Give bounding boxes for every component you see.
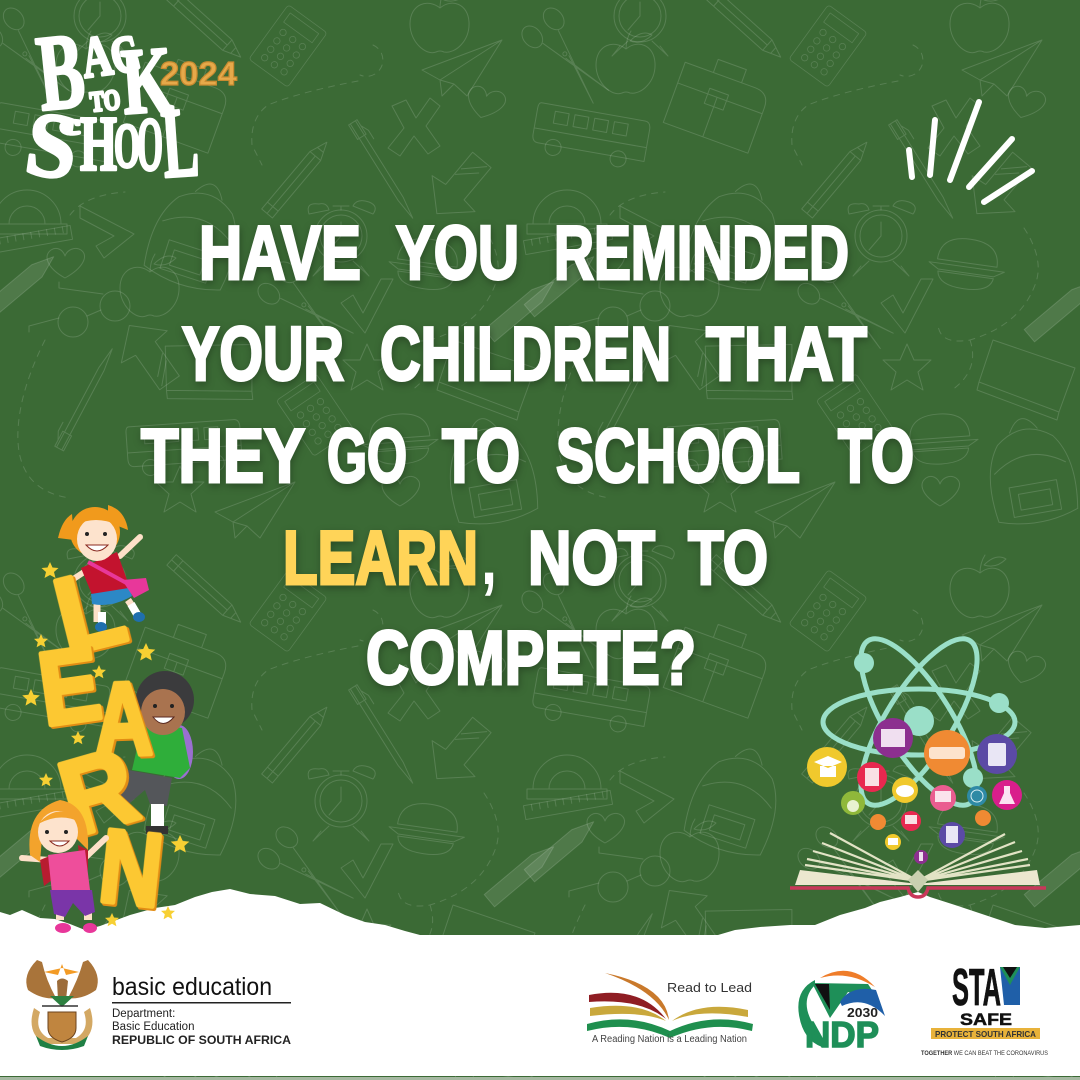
logo: Stay Safe — [921, 959, 1049, 1057]
torn paper footer band — [0, 889, 1080, 1076]
main question heading: THEY — [141, 414, 305, 499]
logo: NDP 2030: NDP — [805, 1014, 879, 1055]
main question heading: TO — [688, 516, 768, 601]
main question heading: THAT — [706, 312, 867, 397]
logo: Back to School 2024: A — [77, 22, 116, 91]
letters: LEARN: R — [47, 725, 149, 859]
letters: LEARN: L — [43, 544, 136, 677]
subject bubbles — [807, 718, 1022, 864]
logo: Back to School 2024: K — [119, 27, 176, 135]
icon: coat of arms — [26, 960, 98, 1050]
main question heading: NOT — [528, 516, 655, 601]
atom orbits — [823, 623, 1015, 821]
letters: LEARN: E — [32, 625, 107, 748]
logo: Department of Basic Education: Department: — [112, 1008, 175, 1020]
logo: NDP 2030 — [798, 971, 885, 1055]
logo: Back to School 2024: B — [32, 11, 90, 134]
main question heading: YOU — [396, 211, 519, 296]
child: girl in pink shirt — [22, 800, 106, 933]
main question heading: CHILDREN — [380, 312, 671, 397]
main question heading: TO — [442, 414, 520, 499]
logo: Back to School 2024: 2024 — [160, 55, 238, 92]
logo: Back to School 2024: TO — [89, 85, 122, 118]
main question heading: LEARN — [283, 516, 478, 601]
logo: Back to School 2024: L — [158, 86, 202, 199]
logo: Stay Safe: SAFE — [960, 1010, 1012, 1029]
main question heading: REMINDED — [554, 211, 849, 296]
logo: Back to School 2024: H — [80, 100, 117, 187]
logo: Back to School 2024: O — [137, 103, 163, 187]
logo: Department of Basic Education: REPUBLIC OF SOUTH AFRICA — [112, 1035, 291, 1047]
logo: Department of Basic Education — [26, 960, 291, 1050]
main question heading: SCHOOL — [556, 414, 800, 499]
child: boy in green shirt — [117, 671, 194, 834]
child: girl in red dress — [58, 505, 149, 632]
main question heading: GO — [327, 414, 407, 499]
department name: basic education — [112, 973, 272, 1001]
logo: Read to Lead: Read to Lead — [667, 981, 752, 995]
logo: NDP 2030: 2030 — [847, 1005, 878, 1020]
icon: burst rays — [909, 102, 1032, 202]
letters: LEARN: A — [92, 661, 154, 779]
footer base line — [0, 1077, 1080, 1080]
logo: Read to Lead — [587, 973, 753, 1045]
main question heading: YOUR — [182, 312, 344, 397]
illustration: children climbing LEARN letters — [22, 505, 194, 933]
logo: Read to Lead: A Reading Nation is a Leading Nation — [592, 1034, 747, 1045]
letters: LEARN: N — [94, 808, 168, 930]
logo: Back to School 2024: C — [105, 24, 146, 87]
logo: Back to School 2024: c — [60, 108, 80, 141]
illustration: atom and open book — [790, 623, 1046, 897]
main question heading: , — [481, 516, 497, 601]
open book — [790, 833, 1046, 897]
main question heading — [141, 211, 914, 701]
logo: Back to School 2024: O — [114, 110, 140, 181]
logo: Department of Basic Education: Basic Education — [112, 1021, 194, 1033]
letters: LEARN — [32, 544, 168, 930]
logo: Back to School 2024: S — [20, 91, 84, 199]
logo: Back to School 2024 — [20, 11, 238, 199]
stars — [22, 562, 189, 926]
logo: Stay Safe: STA — [952, 959, 1001, 1017]
atom nucleus and electrons — [854, 653, 1009, 788]
main question heading: TO — [838, 414, 914, 499]
logo: Stay Safe: PROTECT SOUTH AFRICA — [935, 1029, 1036, 1039]
logo: Stay Safe: TOGETHER WE CAN BEAT THE CORONAVIRUS — [921, 1050, 1049, 1057]
main question heading: COMPETE? — [366, 616, 696, 701]
main question heading: HAVE — [199, 211, 361, 296]
